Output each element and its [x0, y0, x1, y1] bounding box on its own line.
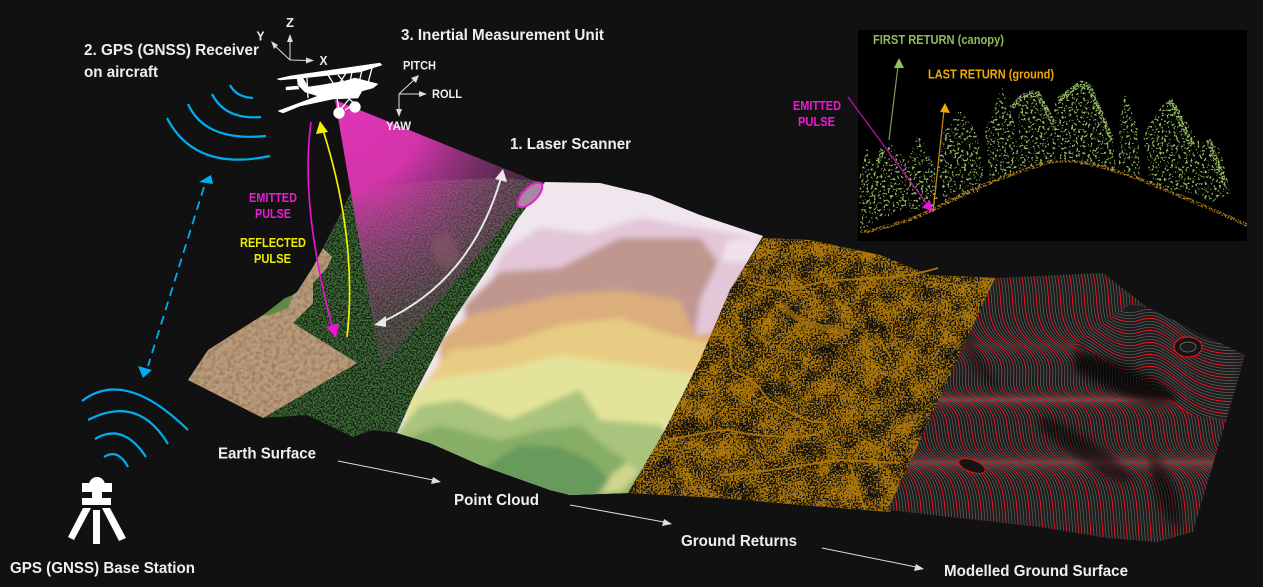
- label: axis X: X: [320, 54, 328, 68]
- label: modelled ground surface: Modelled Ground Surface: [944, 563, 1128, 580]
- terrain: point cloud elevation bands: [390, 170, 770, 500]
- arrow: scan swath: [374, 169, 507, 327]
- label: axis Z: Z: [286, 16, 294, 30]
- heading: GPS receiver: 2. GPS (GNSS) Receiver: [84, 42, 259, 59]
- chart: ground points: [860, 161, 1247, 233]
- label: emitted pulse: EMITTED: [249, 191, 297, 205]
- label: axis Y: Y: [256, 30, 265, 44]
- arrow: earth surface to point cloud: [338, 461, 441, 484]
- icon: pitch roll yaw axes: [396, 75, 427, 117]
- label: pitch: PITCH: [403, 58, 436, 72]
- arrow: emitted pulse: [308, 122, 339, 338]
- label: emitted pulse: [249, 191, 297, 221]
- label: roll: ROLL: [432, 87, 462, 101]
- label: ground returns: Ground Returns: [681, 533, 797, 550]
- label: reflected pulse: [240, 236, 306, 266]
- label: last return: LAST RETURN (ground): [928, 68, 1054, 82]
- laser beam: [335, 100, 540, 368]
- arrow: emitted pulse in section: [848, 97, 933, 212]
- label: point cloud: Point Cloud: [454, 492, 539, 509]
- heading: laser scanner: 1. Laser Scanner: [510, 136, 631, 153]
- terrain: bare clearing: [188, 248, 357, 418]
- icon: XYZ axes: [271, 16, 314, 64]
- terrain: modelled ground surface contours: [888, 273, 1245, 542]
- label: emitted pulse: PULSE: [255, 207, 291, 221]
- scan footprint ellipse: [514, 179, 546, 211]
- arrow: first return: [889, 58, 904, 140]
- panel: canopy cross-section: [858, 30, 1247, 241]
- label: emitted pulse in section: PULSE: [798, 115, 835, 129]
- heading: inertial measurement unit: 3. Inertial Measurement Unit: [401, 27, 605, 44]
- label: yaw: YAW: [386, 119, 412, 133]
- arrow: GPS link dashed: [138, 175, 213, 378]
- label: emitted pulse in section: EMITTED: [793, 99, 841, 113]
- arrow: reflected pulse: [316, 121, 350, 337]
- label: reflected pulse: PULSE: [254, 252, 291, 266]
- arrow: last return: [933, 103, 950, 212]
- terrain: forest earth surface: [263, 178, 545, 437]
- label: emitted pulse in section: [793, 99, 841, 129]
- icon: base station waves: [82, 390, 188, 467]
- chart: tree points: [859, 80, 1231, 232]
- label: first return: FIRST RETURN (canopy): [873, 33, 1004, 47]
- panel: terrain strip: [188, 178, 1245, 542]
- icon: receiver waves: [167, 85, 270, 160]
- heading: on aircraft: on aircraft: [84, 64, 159, 81]
- label: reflected pulse: REFLECTED: [240, 236, 306, 250]
- arrow: point cloud to ground returns: [570, 505, 672, 526]
- arrow: ground returns to modelled surface: [822, 548, 924, 571]
- icon: base station tripod: [68, 477, 126, 544]
- label: base station: GPS (GNSS) Base Station: [10, 560, 195, 577]
- icon: biplane: [277, 63, 382, 118]
- terrain: ground returns: [628, 238, 998, 512]
- label: earth surface: Earth Surface: [218, 446, 316, 462]
